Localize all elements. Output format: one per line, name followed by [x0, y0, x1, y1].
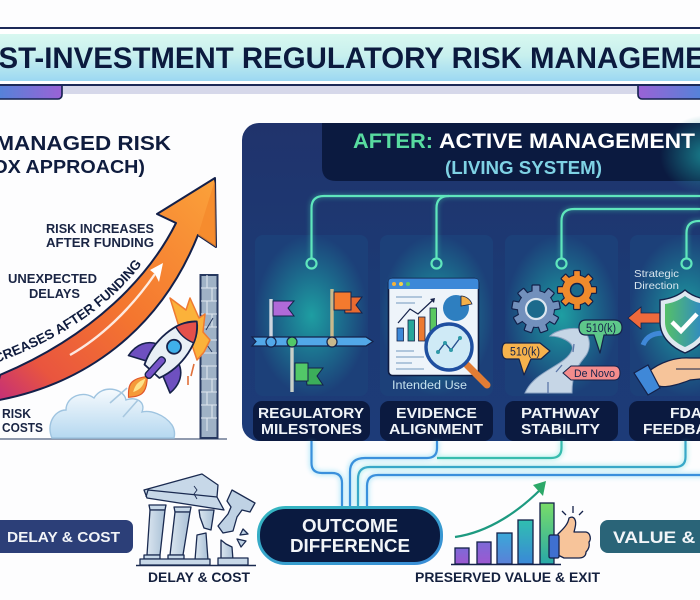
- label: unexpected delays: [8, 271, 97, 301]
- icon: pathway road and gears: [502, 270, 622, 393]
- label: evidence alignment: ALIGNMENT: [389, 421, 483, 438]
- label: preserved value and exit: PRESERVED VALUE & EXIT: [415, 570, 601, 585]
- hand: [634, 358, 700, 395]
- bubble: S10(k): 510(k): [586, 323, 616, 335]
- icon: brick wall: [200, 275, 218, 438]
- gear grey: [512, 285, 560, 333]
- header box: [322, 115, 700, 195]
- connector lines: to outcome: [312, 441, 700, 507]
- label: evidence alignment: [380, 401, 493, 441]
- broken column top: [218, 490, 255, 533]
- bubble: 510(k): 510(k): [510, 346, 540, 358]
- ribbon tab left: [0, 80, 62, 99]
- heading: after: AFTER:: [353, 130, 433, 153]
- ribbon tab right: [638, 80, 700, 99]
- magnifier: [426, 324, 487, 385]
- label: unexpected delays: UNEXPECTED: [8, 271, 97, 286]
- caption: strategic direction: Direction: [634, 280, 679, 292]
- caption: intended use: Intended Use: [392, 380, 467, 392]
- icon: FDA feedback shield: [628, 268, 700, 395]
- green flag: [292, 342, 323, 392]
- label: risk costs: RISK: [2, 406, 32, 421]
- label: risk costs: [2, 406, 43, 435]
- panel: after, active management: [242, 115, 700, 441]
- card backgrounds: [255, 235, 700, 396]
- label: delay and cost: DELAY & COST: [148, 570, 251, 585]
- callout: delay and cost pill: DELAY & COST: [7, 530, 120, 546]
- icon: rocket: [107, 303, 218, 416]
- title banner: [0, 28, 700, 99]
- bar chart: preserved value: [451, 481, 590, 564]
- arrow: direction: [628, 307, 664, 329]
- outcome difference pill: DIFFERENCE: [290, 536, 410, 556]
- callout: value and exit pill: [600, 520, 700, 553]
- arrow: rising risk: [0, 178, 216, 401]
- label: pathway stability: PATHWAY: [521, 405, 600, 422]
- label: FDA feedback: FDA: [670, 405, 700, 422]
- icon: impact burst: [170, 298, 210, 360]
- caption: strategic direction: [634, 268, 679, 292]
- heading: active management: ACTIVE MANAGEMENT: [439, 130, 695, 153]
- subheading: living system: (LIVING SYSTEM): [445, 158, 602, 178]
- label: unexpected delays: DELAYS: [29, 286, 80, 301]
- icon: thumbs up: [549, 506, 590, 558]
- label: FDA feedback: [629, 401, 700, 441]
- purple flag: [271, 299, 294, 342]
- label: risk increases after funding: RISK INCREASES: [46, 221, 154, 236]
- icon: crumbling temple: [136, 474, 256, 566]
- caption: strategic direction: Strategic: [634, 268, 679, 280]
- icon: regulatory milestones timeline: [252, 289, 373, 392]
- label: pathway stability: STABILITY: [521, 421, 600, 438]
- label: risk increases after funding: [46, 221, 154, 250]
- orange flag: [332, 289, 362, 342]
- icon: cloud: [50, 388, 175, 438]
- icon: evidence dashboard: [388, 278, 487, 392]
- label: regulatory milestones: MILESTONES: [261, 421, 362, 438]
- gear orange: [558, 270, 596, 310]
- road: [525, 328, 589, 393]
- label: regulatory milestones: REGULATORY: [258, 405, 364, 422]
- shield: [660, 290, 700, 353]
- label: risk increases after funding: AFTER FUNDING: [46, 235, 154, 250]
- columns: [140, 505, 248, 565]
- timeline bar: [252, 337, 373, 346]
- panel: before, unmanaged risk: [0, 133, 227, 440]
- arrow: growth curve: [455, 481, 546, 537]
- bubble: De Novo: De Novo: [574, 368, 615, 380]
- outcome difference pill: OUTCOME: [302, 516, 398, 536]
- label: pathway stability: [505, 401, 618, 441]
- connector lines: top network: [306, 196, 700, 268]
- label: evidence alignment: EVIDENCE: [396, 405, 477, 422]
- label: regulatory milestones: [253, 401, 370, 441]
- outcome difference pill: [258, 508, 442, 564]
- callout: delay and cost pill: [0, 520, 133, 553]
- label: risk costs: COSTS: [2, 420, 43, 435]
- debris sparks: [188, 364, 194, 385]
- ground line: [0, 438, 227, 440]
